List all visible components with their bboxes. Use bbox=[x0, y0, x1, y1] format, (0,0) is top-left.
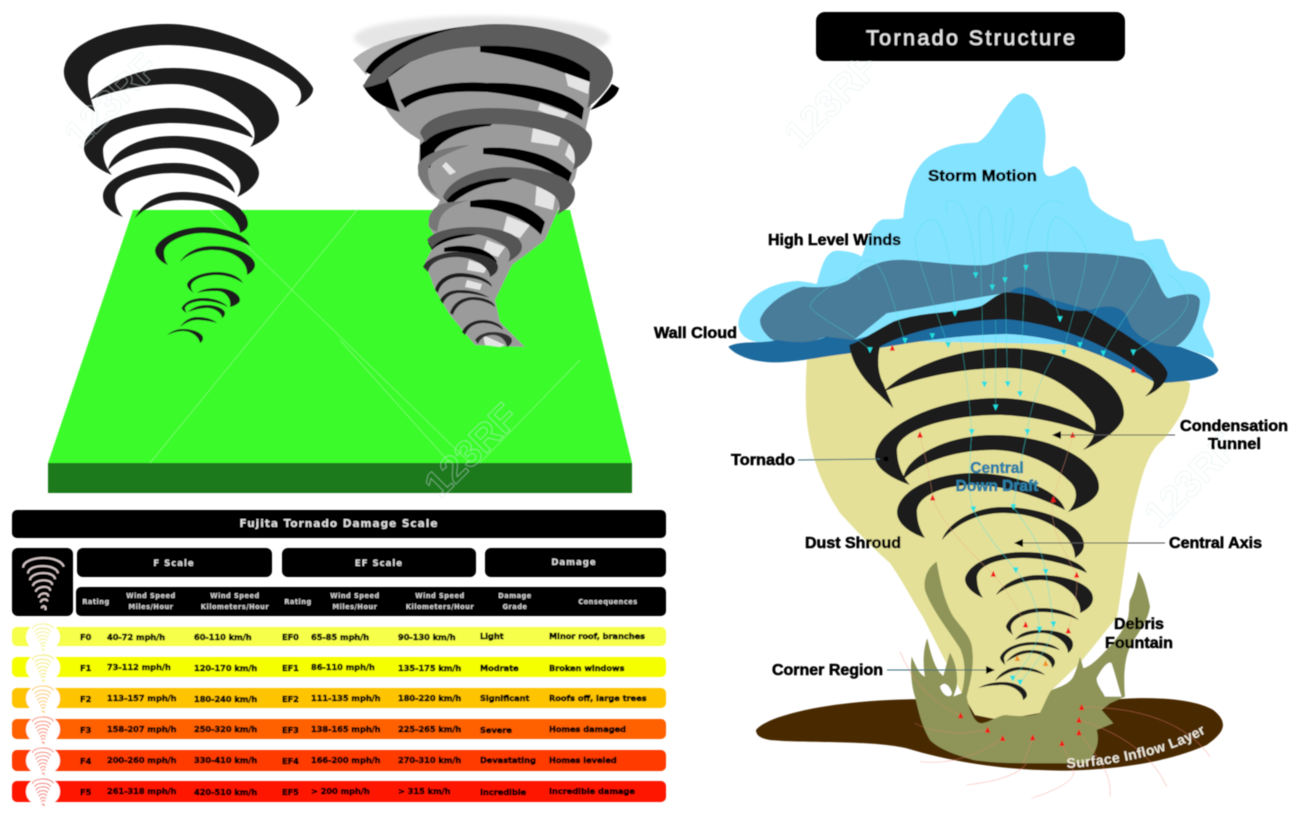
row F4: 200-260 mph/h bbox=[107, 755, 177, 765]
row F1: Broken windows bbox=[549, 663, 625, 673]
row F4: 330-410 km/h bbox=[194, 755, 257, 765]
black spiral tornado bbox=[64, 24, 313, 343]
cyan downdraft flow lines bbox=[810, 200, 1188, 432]
red inflow lines bbox=[900, 435, 1210, 798]
label: central axis with leader: Central Axis bbox=[1169, 535, 1262, 552]
row F1: 86-110 mph/h bbox=[311, 662, 375, 672]
damage scale title bar bbox=[12, 510, 666, 538]
EF scale header bbox=[282, 548, 476, 577]
label: central down draft bbox=[956, 460, 1038, 495]
dust shroud bbox=[806, 330, 1190, 720]
row F3: F3 bbox=[80, 725, 92, 735]
column headers: Wind Speed bbox=[126, 592, 176, 600]
row F1: Modrate bbox=[480, 663, 519, 673]
column headers: Consequences bbox=[578, 598, 638, 606]
EF scale header: EF Scale bbox=[355, 559, 403, 569]
row F2 bbox=[12, 686, 666, 713]
table icon box bbox=[12, 548, 73, 616]
row F3: Homes damaged bbox=[549, 724, 626, 734]
label: central down draft: Down Draft bbox=[956, 478, 1038, 495]
label: condensation tunnel with leader: Condensation bbox=[1180, 418, 1288, 435]
column headers: Rating bbox=[284, 598, 312, 606]
watermarks: 123RF bbox=[57, 46, 167, 156]
row F4: EF4 bbox=[282, 756, 299, 766]
row F3: 225-265 km/h bbox=[398, 724, 461, 734]
F scale header bbox=[77, 548, 272, 577]
column headers: Wind Speed bbox=[330, 592, 380, 600]
column headers: Miles/Hour bbox=[129, 603, 174, 611]
label: tornado with leader: Tornado bbox=[731, 452, 795, 469]
green ground platform bbox=[48, 210, 632, 493]
wall cloud bbox=[728, 287, 1218, 383]
label: condensation tunnel with leader: Tunnel bbox=[1208, 436, 1261, 453]
row F1: 135-175 km/h bbox=[398, 663, 461, 673]
label: surface inflow layer: Surface Inflow Layer bbox=[1066, 726, 1204, 769]
row F3: 158-207 mph/h bbox=[107, 724, 177, 734]
row F2: Roofs off, large trees bbox=[549, 693, 647, 703]
row F5: Incredible bbox=[480, 787, 527, 797]
column headers: Damage bbox=[498, 592, 532, 600]
structure title: Tornado Structure bbox=[866, 26, 1075, 50]
row F0: 60-110 km/h bbox=[194, 632, 252, 642]
row F1 bbox=[12, 655, 666, 682]
label: dust shroud: Dust Shroud bbox=[805, 535, 901, 552]
F scale header: F Scale bbox=[153, 559, 195, 569]
label: debris fountain: Fountain bbox=[1105, 635, 1173, 652]
row F2: 113-157 mph/h bbox=[107, 693, 177, 703]
row F4: Homes leveled bbox=[549, 755, 617, 765]
debris fountain bbox=[911, 562, 1150, 763]
light blue storm cloud bbox=[738, 93, 1214, 358]
row F0: 40-72 mph/h bbox=[107, 632, 165, 642]
label: tornado with leader bbox=[731, 452, 888, 469]
row F1: EF1 bbox=[282, 663, 299, 673]
row F2: 180-240 km/h bbox=[194, 694, 257, 704]
row F2: EF2 bbox=[282, 694, 299, 704]
column headers: Grade bbox=[503, 603, 527, 611]
watermarks: 123RF bbox=[417, 396, 527, 506]
label: debris fountain: Debris bbox=[1114, 616, 1164, 633]
row F4: F4 bbox=[80, 756, 92, 766]
row F5: Incredible damage bbox=[549, 786, 635, 796]
row F5: > 200 mph/h bbox=[311, 786, 370, 796]
damage header bbox=[485, 548, 666, 577]
row F0: Light bbox=[480, 631, 504, 641]
cyan lower flow lines bbox=[969, 432, 1053, 682]
row F1: 73-112 mph/h bbox=[107, 662, 171, 672]
label: wall cloud: Wall Cloud bbox=[654, 325, 737, 342]
watermarks: 123RF bbox=[777, 46, 887, 156]
column headers bbox=[76, 587, 666, 616]
grey blue cloud layer bbox=[760, 252, 1200, 350]
row F3: EF3 bbox=[282, 725, 299, 735]
brown surface layer bbox=[756, 698, 1223, 771]
row F4 bbox=[12, 748, 666, 775]
row F3: 250-320 km/h bbox=[194, 724, 257, 734]
column headers: Kilometers/Hour bbox=[201, 603, 269, 611]
column headers: Rating bbox=[82, 598, 110, 606]
damage scale title bar: Fujita Tornado Damage Scale bbox=[240, 518, 438, 530]
row F5: F5 bbox=[80, 787, 92, 797]
row F0: Minor roof, branches bbox=[549, 631, 645, 641]
label: high level winds: High Level Winds bbox=[768, 232, 901, 249]
row F0: EF0 bbox=[282, 632, 299, 642]
grey shaded tornado bbox=[353, 16, 619, 347]
row F5 bbox=[12, 779, 666, 806]
row F5: > 315 km/h bbox=[398, 786, 451, 796]
label: condensation tunnel with leader bbox=[1052, 418, 1288, 453]
row F5: 420-510 km/h bbox=[194, 787, 257, 797]
row F2: 111-135 mph/h bbox=[311, 693, 381, 703]
damage header: Damage bbox=[551, 558, 597, 568]
column headers: Miles/Hour bbox=[333, 603, 378, 611]
label: corner region with leader: Corner Region bbox=[772, 662, 883, 679]
row F4: 166-200 mph/h bbox=[311, 755, 381, 765]
label: corner region with leader bbox=[772, 662, 995, 679]
column headers: Kilometers/Hour bbox=[406, 603, 474, 611]
label: central axis with leader bbox=[1014, 535, 1262, 552]
column headers: Wind Speed bbox=[210, 592, 260, 600]
row F2: 180-220 km/h bbox=[398, 693, 461, 703]
flow arrowheads upper bbox=[867, 265, 1136, 437]
row F2: F2 bbox=[80, 694, 91, 704]
label: storm motion: Storm Motion bbox=[928, 168, 1037, 185]
row F4: 270-310 km/h bbox=[398, 755, 461, 765]
watermarks: 123RF bbox=[1137, 426, 1247, 536]
row F3 bbox=[12, 717, 666, 744]
row F0: 65-85 mph/h bbox=[311, 632, 369, 642]
row F5: 261-318 mph/h bbox=[107, 786, 177, 796]
row F3: 138-165 mph/h bbox=[311, 724, 381, 734]
flow arrowheads lower bbox=[917, 429, 1084, 746]
column headers: Wind Speed bbox=[415, 592, 465, 600]
row F1: F1 bbox=[80, 663, 92, 673]
watermarks bbox=[57, 46, 1247, 536]
black condensation funnel bbox=[849, 292, 1168, 700]
row F4: Devastating bbox=[480, 755, 536, 765]
row F3: Severe bbox=[480, 725, 512, 735]
label: debris fountain bbox=[1105, 616, 1173, 652]
row F0 bbox=[12, 624, 666, 651]
row F1: 120-170 km/h bbox=[194, 663, 257, 673]
structure title bbox=[816, 12, 1125, 61]
row F5: EF5 bbox=[282, 787, 299, 797]
row F2: Significant bbox=[480, 693, 529, 703]
label: central down draft: Central bbox=[970, 460, 1024, 477]
row F0: F0 bbox=[80, 632, 92, 642]
row F0: 90-130 km/h bbox=[398, 632, 456, 642]
